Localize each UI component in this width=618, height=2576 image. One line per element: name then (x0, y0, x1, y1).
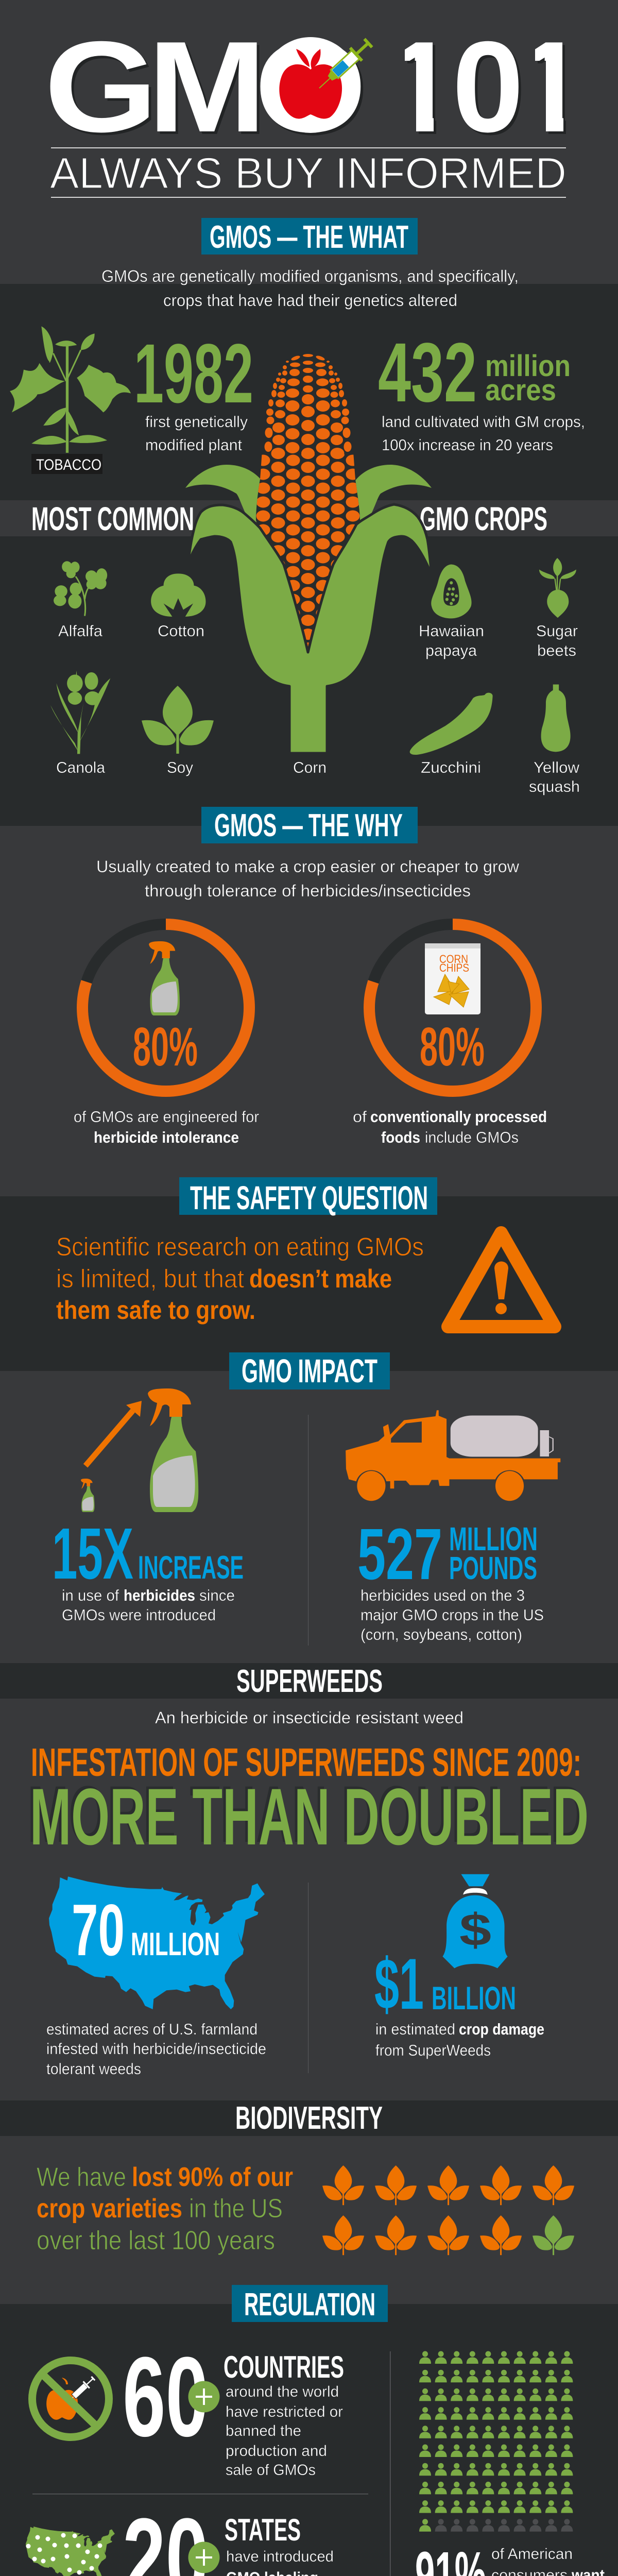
panel: GMO impact (0, 1352, 618, 1663)
heading: GMO impact (229, 1352, 390, 1389)
panel: GMOs the why (0, 807, 618, 1196)
label: tobacco: TOBACCO (36, 456, 101, 473)
ring chart: 80% herbicide (74, 924, 259, 1146)
title: GMO 101: G (44, 15, 158, 159)
ring chart: 80% herbicide: of GMOs are engineered for (74, 1108, 259, 1126)
heading: GMOs the why (201, 807, 418, 843)
icon: tanker truck (346, 1410, 560, 1502)
map: 70 million acres: tolerant weeds (46, 2060, 141, 2078)
panel: crops grid (0, 536, 618, 826)
stat: 527 million pounds: (corn, soybeans, cotton) (360, 1625, 522, 1643)
stat: 15X increase: 15X (52, 1513, 133, 1594)
title: GMO 101: M (148, 15, 266, 159)
panel: GMOs the what (0, 218, 618, 500)
intro text: through tolerance of herbicides/insecticides (145, 882, 471, 900)
heading: regulation (232, 2285, 388, 2323)
stat: 15X increase: GMOs were introduced (62, 1606, 216, 1624)
stat: 527 million pounds (357, 1513, 544, 1643)
biodiversity statement: crop varieties (37, 2194, 182, 2224)
panel: biodiversity band: BIODIVERSITY (235, 2100, 383, 2136)
crop: sugar beets (536, 558, 578, 659)
icon: corn cob (185, 352, 432, 753)
icon: money bag: $ (459, 1904, 491, 1955)
title: GMO 101 (50, 37, 566, 135)
panel: header (50, 37, 566, 198)
stat: 91 percent (415, 2538, 605, 2576)
stat: 15X increase: in use of (62, 1586, 119, 1604)
map: 70 million acres: 70 (72, 1889, 125, 1971)
icon: warning triangle (448, 1233, 555, 1327)
stat: 20+ states (123, 2495, 334, 2576)
heading: GMOs the what (201, 218, 418, 255)
map: 70 million acres: estimated acres of U.S. farmland (46, 2020, 258, 2038)
crop: zucchini (410, 693, 493, 776)
panel: biodiversity band (0, 2100, 618, 2136)
stat: 15X increase: herbicides (124, 1586, 195, 1604)
map: 70 million acres (46, 1876, 266, 2078)
title: GMO 101: 1 (514, 15, 587, 159)
stat: 527 million pounds: herbicides used on the 3 (360, 1586, 525, 1604)
crop: canola: Canola (56, 758, 106, 776)
stat: 527 million pounds: POUNDS (449, 1551, 537, 1586)
heading: the safety question: THE SAFETY QUESTION (190, 1179, 428, 1216)
biodiversity statement: over the last 100 years (37, 2226, 275, 2256)
ring chart: 80% processed foods: of (353, 1108, 367, 1126)
ring chart: 80% processed foods (353, 924, 547, 1146)
subtitle: always buy informed: ALWAYS BUY INFORMED (50, 149, 566, 197)
biodiversity statement: We have (37, 2162, 126, 2192)
stat: 1982 (134, 326, 253, 454)
icon: banned GMO apple (32, 2361, 109, 2437)
heading: regulation: REGULATION (244, 2287, 375, 2323)
stat: 60+ countries: have restricted or (226, 2403, 343, 2420)
stat: 432 million acres (378, 325, 585, 454)
stat: $1 billion: BILLION (432, 1980, 516, 2016)
safety statement: Scientific research on eating GMOs (56, 1232, 424, 1261)
icon grid: people 91 percent (419, 2351, 573, 2532)
safety statement: doesn’t make (249, 1264, 392, 1293)
stat: $1 billion (374, 1943, 544, 2059)
stat: 20+ states: have introduced (226, 2548, 334, 2565)
stat: $1 billion: crop damage (459, 2020, 544, 2038)
stat: 432 million acres: acres (485, 374, 556, 407)
heading: GMOs the what: GMOS — THE WHAT (210, 219, 408, 255)
crop: cotton: Cotton (158, 622, 204, 640)
heading: GMO impact: GMO IMPACT (242, 1352, 377, 1389)
stat: 60+ countries: sale of GMOs (226, 2462, 316, 2479)
safety statement: them safe to grow. (56, 1296, 255, 1325)
icon: small bottle (81, 1479, 95, 1512)
crop: papaya (419, 565, 484, 659)
ring chart: 80% processed foods: 80% (420, 1016, 485, 1077)
crop: soy (142, 686, 214, 776)
heading: the safety question (179, 1177, 437, 1216)
label: corn: Corn (293, 758, 327, 776)
heading: GMOs the why: GMOS — THE WHY (214, 808, 403, 843)
panel: biodiversity (0, 2136, 618, 2304)
stat: $1 billion: in estimated (375, 2020, 455, 2038)
stat: 432 million acres: million (485, 349, 571, 383)
stat: 91 percent: of American (491, 2546, 573, 2563)
icon grid: crop varieties (322, 2165, 574, 2255)
stat: 20+ states: STATES (225, 2513, 301, 2547)
panel: the safety question (0, 1177, 618, 1371)
icon: money bag (442, 1874, 508, 1968)
intro text: GMOs are genetically modified organisms, and specifically, (101, 267, 519, 285)
safety statement: is limited, but that (56, 1264, 244, 1293)
ring chart: 80% herbicide: 80% (133, 1016, 198, 1077)
definition text: An herbicide or insecticide resistant weed (155, 1708, 464, 1727)
panel: most common GMO crops band (0, 500, 618, 537)
stat: 15X increase: since (199, 1586, 235, 1604)
panel: superweeds (0, 1699, 618, 2100)
crop: zucchini: Zucchini (421, 758, 481, 776)
stat: 15X increase (52, 1513, 244, 1624)
biodiversity statement: lost 90% of our (132, 2162, 293, 2192)
stat: 15X increase: INCREASE (138, 1550, 244, 1586)
stat: 1982: 1982 (134, 326, 253, 420)
stat: 60+ countries: 60 (123, 2333, 209, 2460)
crop: alfalfa: Alfalfa (58, 622, 103, 640)
stat: 60+ countries: COUNTRIES (224, 2350, 344, 2384)
panel: superweeds band (0, 1663, 618, 1699)
ring chart: 80% processed foods: CORN (439, 953, 468, 965)
stat: 432 million acres: 100x increase in 20 years (382, 436, 553, 454)
crop: papaya: Hawaiian (419, 622, 484, 640)
crop: papaya: papaya (425, 641, 477, 659)
stat: 527 million pounds: major GMO crops in the US (360, 1606, 544, 1624)
intro text: crops that have had their genetics altered (163, 291, 457, 310)
arrow: increase (85, 1401, 142, 1466)
crop: cotton (151, 573, 205, 640)
intro text: Usually created to make a crop easier or cheaper to grow (96, 857, 520, 876)
map: 70 million acres: MILLION (131, 1926, 220, 1962)
stat: 432 million acres: land cultivated with GM crops, (382, 413, 585, 431)
title: GMO 101: O (254, 15, 367, 159)
stat: $1 billion: from SuperWeeds (375, 2041, 491, 2059)
ring chart: 80% processed foods: conventionally processed (370, 1108, 547, 1126)
intro text (101, 267, 519, 310)
stat: 60+ countries: around the world (226, 2383, 339, 2400)
ring chart: 80% herbicide: herbicide intolerance (94, 1128, 239, 1146)
stat: 1982: first genetically (145, 413, 248, 431)
stat: 527 million pounds: 527 (357, 1513, 442, 1595)
panel: most common GMO crops band: MOST COMMON (31, 500, 194, 537)
crop: alfalfa (54, 561, 107, 640)
title: GMO 101: 0 (452, 15, 524, 159)
map: 70 million acres: infested with herbicide/insecticide (46, 2040, 266, 2058)
crop: sugar beets: Sugar (536, 622, 578, 640)
stat: 432 million acres: 432 (378, 325, 477, 419)
crop: soy: Soy (167, 758, 193, 776)
panel: regulation (0, 2285, 618, 2576)
safety statement (56, 1232, 424, 1325)
intro text (96, 857, 520, 900)
icon: apple with syringe (279, 36, 375, 118)
icon: big bottle (148, 1388, 198, 1512)
stat: $1 billion: $1 (374, 1943, 424, 2024)
ring chart: 80% processed foods: foods (381, 1128, 420, 1146)
biodiversity statement (37, 2162, 293, 2256)
stat: 60+ countries: banned the (226, 2422, 301, 2439)
biodiversity statement: in the US (189, 2194, 283, 2224)
icon: tobacco plant (10, 326, 131, 453)
stat: 527 million pounds: MILLION (449, 1520, 538, 1557)
crop: canola (50, 671, 110, 776)
stat: 1982: modified plant (145, 436, 242, 454)
stat: 60+ countries: production and (226, 2443, 327, 2460)
ring chart: 80% processed foods: include GMOs (425, 1128, 519, 1146)
panel: superweeds band: SUPERWEEDS (236, 1664, 383, 1699)
crop: yellow squash (529, 685, 580, 795)
crop: yellow squash: squash (529, 777, 580, 795)
ring chart: 80% processed foods: CHIPS (439, 961, 469, 974)
icon: US map with dots (26, 2527, 115, 2576)
stat: 60+ countries (123, 2333, 344, 2479)
crop: sugar beets: beets (537, 641, 576, 659)
title: GMO 101: 1 (385, 15, 457, 159)
crop: yellow squash: Yellow (534, 758, 580, 776)
